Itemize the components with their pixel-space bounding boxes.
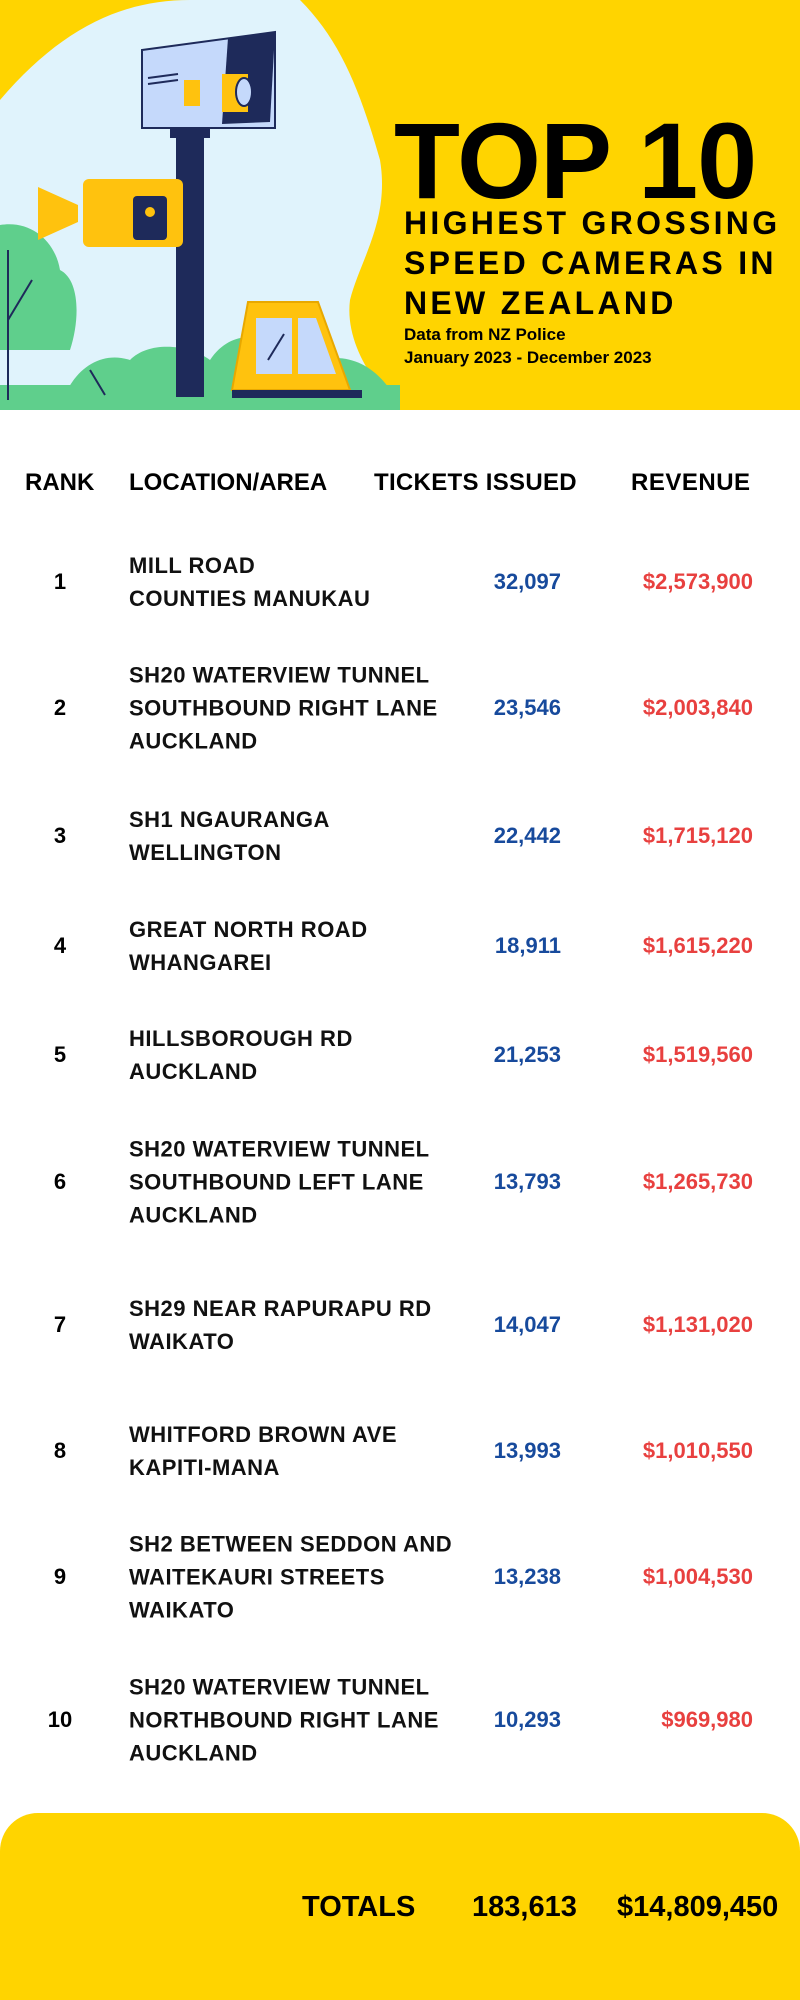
text: KAPITI-MANA — [129, 1455, 280, 1480]
row 1 — [54, 553, 753, 611]
text: WELLINGTON — [129, 840, 281, 865]
row 1: 32,097 — [494, 569, 561, 594]
table header: RANK — [25, 469, 94, 496]
totals label: TOTALS — [302, 1891, 415, 1923]
text: HILLSBOROUGH RD — [129, 1026, 353, 1051]
text: AUCKLAND — [129, 728, 258, 754]
row 10: NORTHBOUND RIGHT LANE — [129, 1708, 439, 1732]
row 6 — [54, 1136, 753, 1228]
row 3: 3 — [54, 823, 66, 848]
row 2: 23,546 — [494, 695, 561, 720]
text: WHANGAREI — [129, 950, 272, 975]
row 10: 10 — [48, 1707, 72, 1732]
row 4: $1,615,220 — [643, 933, 753, 958]
text: WAIKATO — [129, 1329, 234, 1354]
row 7 — [54, 1296, 753, 1354]
total revenue: $14,809,450 — [617, 1891, 778, 1923]
row 7: $1,131,020 — [643, 1312, 753, 1337]
row 1: $2,573,900 — [643, 569, 753, 594]
row 2: SOUTHBOUND RIGHT LANE — [129, 696, 438, 720]
row 10 — [48, 1674, 753, 1766]
text: AUCKLAND — [129, 1202, 258, 1228]
row 4: 4 — [54, 933, 66, 958]
illustration: speed camera scene — [0, 0, 400, 410]
car — [232, 302, 350, 390]
row 4 — [54, 917, 753, 975]
table header: LOCATION/AREA — [129, 469, 327, 496]
row 3: $1,715,120 — [643, 823, 753, 848]
row 5: 21,253 — [494, 1042, 561, 1067]
text: SH29 NEAR RAPURAPU RD — [129, 1296, 432, 1321]
row 8: 8 — [54, 1438, 66, 1463]
row 7: 14,047 — [494, 1312, 561, 1337]
row 8: $1,010,550 — [643, 1438, 753, 1463]
subtitle: HIGHEST GROSSING — [404, 205, 780, 241]
text: MILL ROAD — [129, 553, 255, 578]
row 5 — [54, 1026, 753, 1084]
row 6: $1,265,730 — [643, 1169, 753, 1194]
top camera — [142, 32, 275, 128]
row 4: 18,911 — [495, 933, 561, 958]
source note: Data from NZ Police — [404, 325, 566, 344]
text: SH20 WATERVIEW TUNNEL — [129, 662, 430, 688]
table header: TICKETS ISSUED — [374, 469, 577, 496]
row 1: 1 — [54, 569, 66, 594]
text: SH1 NGAURANGA — [129, 807, 330, 832]
text: AUCKLAND — [129, 1740, 258, 1766]
row 3: 22,442 — [494, 823, 561, 848]
row 6: SOUTHBOUND LEFT LANE — [129, 1170, 424, 1194]
source note: January 2023 - December 2023 — [404, 348, 652, 367]
row 5: $1,519,560 — [643, 1042, 753, 1067]
totals panel — [0, 1813, 800, 2000]
row 9: WAITEKAURI STREETS — [129, 1564, 385, 1590]
table header — [25, 469, 751, 496]
text: AUCKLAND — [129, 1059, 258, 1084]
row 2 — [54, 662, 753, 754]
source note — [404, 325, 652, 367]
row 6: 13,793 — [494, 1169, 561, 1194]
row 9: 13,238 — [494, 1564, 561, 1589]
row 3 — [54, 807, 753, 865]
total tickets: 183,613 — [472, 1891, 577, 1923]
row 9 — [54, 1532, 753, 1622]
row 2: $2,003,840 — [643, 695, 753, 720]
side yellow camera — [83, 179, 183, 247]
table header: REVENUE — [631, 469, 751, 496]
text: COUNTIES MANUKAU — [129, 586, 370, 611]
pole — [176, 135, 204, 397]
row 2: 2 — [54, 695, 66, 720]
text: SH20 WATERVIEW TUNNEL — [129, 1674, 430, 1700]
row 9: $1,004,530 — [643, 1564, 753, 1589]
row 10: $969,980 — [661, 1707, 753, 1732]
header banner — [0, 0, 800, 410]
row 5: 5 — [54, 1042, 66, 1067]
text: WAIKATO — [129, 1598, 234, 1622]
subtitle: NEW ZEALAND — [404, 285, 677, 321]
title: TOP 10: TOP 10 — [394, 100, 756, 221]
text: SH2 BETWEEN SEDDON AND — [129, 1532, 452, 1556]
row 8: 13,993 — [494, 1438, 561, 1463]
subtitle: SPEED CAMERAS IN — [404, 245, 777, 281]
text: WHITFORD BROWN AVE — [129, 1422, 397, 1447]
row 8 — [54, 1422, 753, 1480]
text: SH20 WATERVIEW TUNNEL — [129, 1136, 430, 1162]
subtitle — [404, 205, 780, 321]
row 9: 9 — [54, 1564, 66, 1589]
text: GREAT NORTH ROAD — [129, 917, 368, 942]
row 7: 7 — [54, 1312, 66, 1337]
row 10: 10,293 — [494, 1707, 561, 1732]
row 6: 6 — [54, 1169, 66, 1194]
